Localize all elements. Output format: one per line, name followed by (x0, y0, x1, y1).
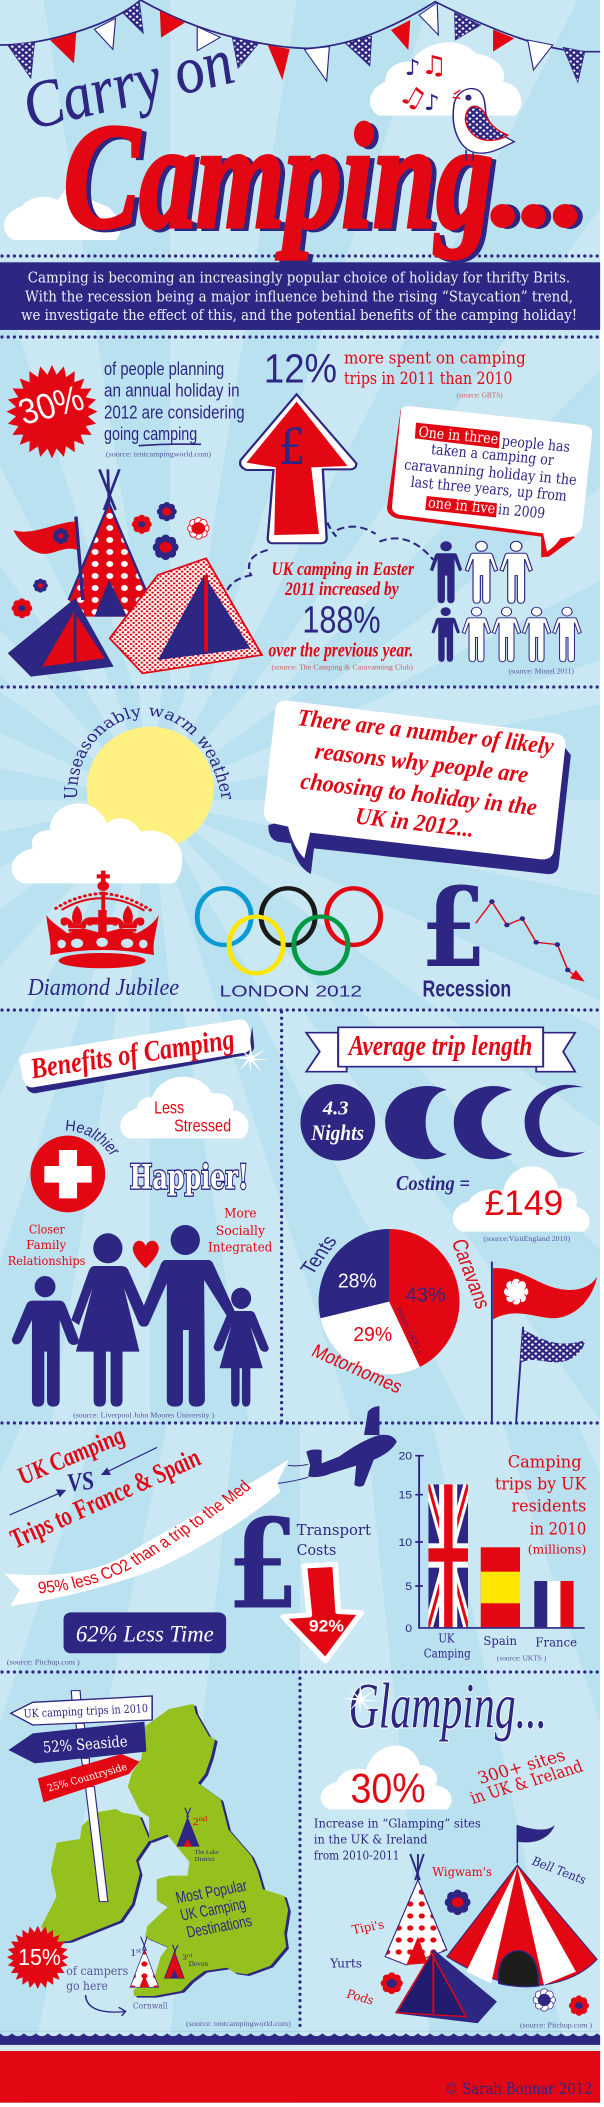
badge: 30% (7, 365, 97, 458)
icon: music notes: ♪ (404, 55, 421, 81)
text: of campers go here (66, 1965, 128, 2016)
cloud: 30%: 30% (351, 1764, 426, 1812)
label: Closer family relationships: Relationships (8, 1255, 86, 1269)
heading: camping trips by UK residents: in 2010 (530, 1520, 586, 1539)
sign: UK camping trips: UK camping trips in 2010 (23, 1702, 148, 1720)
text: 300+ sites: 300+ sites (475, 1746, 568, 1788)
bunting (0, 0, 600, 82)
text: people planning (104, 359, 245, 459)
banner: CO2: 95% less CO2 than a trip to the Med (38, 1479, 251, 1594)
pictogram: family (12, 1225, 269, 1407)
text: people planning: of people planning (104, 359, 224, 380)
sign: 25% Countryside (38, 1754, 139, 1802)
label: London 2012: LONDON 2012 (220, 982, 362, 1000)
badge: 30%: 30% (13, 378, 89, 433)
text: people planning: going camping (104, 424, 197, 445)
label: Diamond Jubilee: Diamond Jubilee (27, 974, 179, 1001)
map: UK and Ireland (42, 1705, 290, 1997)
icon: plane (278, 1406, 397, 1487)
marker: Lake District: nd (199, 1815, 207, 1823)
header panel (0, 0, 600, 330)
text: UK camping in Easter: 2011 increased by (284, 577, 399, 600)
callout: 62% less time: 62% Less Time (76, 1622, 214, 1647)
marker: Devon: Devon (189, 1959, 208, 1968)
panel: UK vs abroad (4, 1406, 587, 1666)
text: most popular destinations: Most Popular (174, 1876, 249, 1907)
illustration: glamping tents (381, 1825, 597, 2023)
bar chart: 10 (398, 1538, 412, 1549)
signpost (8, 1691, 152, 1902)
bar: Spain (481, 1547, 520, 1627)
heading: UK Camping vs France and Spain (4, 1421, 207, 1554)
sign: 25% Countryside: 25% Countryside (46, 1761, 129, 1794)
bar chart: France (535, 1636, 577, 1650)
heading: camping trips by UK residents: trips by UK (495, 1475, 587, 1494)
label: Closer family relationships: Family (26, 1239, 67, 1253)
stat: 12% (264, 347, 526, 399)
marker: Cornwall: st (136, 1947, 141, 1954)
panel: statistics (7, 347, 592, 677)
arrow: up (240, 394, 356, 543)
icon: moon with 4.3 nights: Nights (310, 1121, 364, 1146)
marker: Lake District: District (195, 1855, 215, 1863)
marker: Lake District (176, 1808, 219, 1863)
bar chart: 5 (405, 1582, 412, 1593)
label: more socially integrated: Socially (216, 1224, 265, 1239)
title: Carry on: Carry on (13, 24, 242, 144)
dashed arrows (227, 523, 433, 590)
cloud: over sun (12, 803, 182, 883)
bar chart: UK (438, 1632, 455, 1646)
icon: moon with 4.3 nights: 4.3 (322, 1097, 349, 1119)
intro band (0, 262, 600, 330)
ribbon: Average trip length (306, 1027, 575, 1072)
pie chart: 43% (406, 1283, 446, 1306)
stat: 12%: 12% (264, 347, 337, 392)
marker: Devon: rd (187, 1953, 192, 1959)
text: people planning: 2012 are considering (104, 403, 245, 423)
label: Closer family relationships (8, 1223, 86, 1269)
pictogram: one in three (430, 541, 532, 603)
text: UK camping in Easter: 188% (302, 598, 381, 641)
labels: accommodation types: Yurts (329, 1957, 362, 1971)
bar: France (534, 1581, 574, 1627)
cloud: behind bird (370, 42, 521, 116)
heading: UK Camping vs France and Spain: UK Camping (12, 1421, 130, 1490)
cloud: 30% (321, 1746, 452, 1812)
speech bubble: likely reasons: UK in 2012... (354, 802, 476, 842)
curved text: Healthier: Healthier (66, 1120, 119, 1154)
text: most popular destinations (174, 1876, 254, 1941)
bar chart: 0 (405, 1624, 412, 1635)
banner: Benefits of Camping (19, 1019, 270, 1093)
text: UK camping in Easter: (source: The Camping & Caravanning Club) (272, 663, 413, 671)
text: increase in glamping: Increase in “Glamping” sites (314, 1817, 481, 1831)
source: Liverpool: (source: Liverpool John Moores University ) (73, 1411, 215, 1419)
pie chart (297, 1229, 494, 1398)
icon: music notes (394, 50, 448, 116)
heading: UK Camping vs France and Spain: VS (65, 1466, 96, 1498)
pictogram: one in five (431, 607, 581, 662)
bar chart: Camping (424, 1647, 471, 1661)
callout: 62% less time (64, 1612, 226, 1653)
label: Closer family relationships: Closer (29, 1223, 65, 1237)
label: more socially integrated: Integrated (208, 1241, 272, 1255)
heading: camping trips by UK residents: Camping (508, 1453, 582, 1472)
pie chart: (source: UKTS ) (395, 1306, 424, 1354)
marker: Cornwall (130, 1937, 168, 2011)
banner: CO2 (4, 1460, 289, 1606)
cloud: Less Stressed: Less (154, 1098, 184, 1117)
icon: olympic rings (197, 888, 381, 973)
label: more socially integrated (208, 1206, 272, 1255)
marker: Lake District: The Lake (195, 1848, 219, 1856)
icon: music notes: ♫ (394, 78, 433, 116)
badge: 15% (7, 1926, 69, 1989)
arrow: down 92% (283, 1564, 361, 1661)
speech bubble: likely reasons: reasons why people are (313, 737, 530, 788)
speech bubble: likely reasons: choosing to holiday in the (299, 767, 539, 821)
icon: moon with 4.3 nights (300, 1084, 375, 1161)
label: Transport Costs: Transport (297, 1521, 371, 1539)
label: Happier: Happier! (130, 1158, 248, 1197)
ribbon: Average trip length: Average trip length (347, 1030, 532, 1061)
source: tentcampingworld: (source: tentcampingworld.com) (186, 2019, 291, 2028)
source: Pitchup: (source: Pitchup.com ) (7, 1658, 80, 1666)
icon: music notes: ♫ (421, 50, 448, 80)
cloud: Less Stressed: Stressed (174, 1116, 231, 1135)
text: most popular destinations: UK Camping (178, 1894, 248, 1924)
illustration: tents and flowers (8, 469, 262, 677)
label: Transport Costs (297, 1521, 371, 1559)
pie chart: 29% (353, 1322, 392, 1346)
pie chart: Tents (297, 1232, 342, 1278)
labels: accommodation types: Wigwam's (432, 1866, 492, 1880)
sign: 52% Seaside (8, 1722, 146, 1763)
cloud: Less Stressed (120, 1077, 248, 1138)
arrow: up: £ (278, 418, 306, 476)
speech bubble: one in three: One in three (417, 423, 499, 448)
heading: UK Camping vs France and Spain: Trips to France & Spain (4, 1443, 207, 1554)
bar: UK camping (428, 1484, 468, 1627)
heading: camping trips by UK residents: residents (512, 1497, 586, 1516)
stat: 12%: trips in 2011 than 2010 (344, 369, 512, 389)
speech bubble: likely reasons (264, 701, 571, 874)
text: UK camping in Easter (268, 557, 415, 671)
text: most popular destinations: Destinations (184, 1911, 254, 1941)
cloud: £149 (453, 1166, 589, 1232)
marker: Lake District: 2 (193, 1817, 199, 1828)
cloud: £149: £149 (485, 1184, 563, 1223)
labels: accommodation types: Tipi's (351, 1918, 386, 1938)
icon: pound sign: £ (421, 863, 486, 993)
text: increase in glamping (314, 1817, 481, 1863)
speech bubble: one in three: taken a camping or (430, 440, 555, 469)
heading: camping trips by UK residents: (millions) (528, 1543, 586, 1557)
text: people planning: an annual holiday in (104, 381, 240, 401)
panel: benefits and trip length (8, 1019, 597, 1422)
labels: accommodation types: Bell Tents (529, 1855, 588, 1888)
panel: reasons (12, 700, 585, 1002)
label: more socially integrated: More (224, 1206, 257, 1221)
icon: pound sign: £ (227, 1493, 299, 1637)
heading: camping trips by UK residents (495, 1453, 587, 1557)
speech bubble: one in three (387, 406, 592, 557)
bar chart: Spain (483, 1635, 517, 1649)
marker: Cornwall: 1 (130, 1948, 136, 1959)
speech bubble: one in three: one in five (427, 494, 496, 517)
sign: 52% Seaside: 52% Seaside (42, 1732, 128, 1756)
speech bubble: one in three: in 2009 (497, 500, 546, 522)
pie chart: Motorhomes (308, 1341, 406, 1398)
sign: UK camping trips (11, 1696, 152, 1725)
text: people planning: (source: tentcampingworld.com) (106, 450, 211, 459)
pie chart: 28% (338, 1269, 377, 1292)
text: increase in glamping: in the UK & Ireland (314, 1833, 428, 1847)
icon: bird (453, 89, 514, 161)
cloud: behind title left (4, 190, 121, 240)
bar chart: 15 (398, 1490, 412, 1501)
label: Transport Costs: Costs (297, 1541, 336, 1559)
badge: 15%: 15% (18, 1945, 61, 1971)
icon: health cross (30, 1136, 105, 1212)
text: UK camping in Easter: UK camping in Easter (272, 557, 415, 580)
icon: heart (133, 1241, 159, 1268)
bar chart: (source: UKTS ) (497, 1654, 547, 1662)
pie chart: Caravans (446, 1237, 494, 1311)
bar chart (398, 1451, 585, 1662)
icon: sun (87, 727, 214, 850)
source: Pitchup: (source: Pitchup.com ) (520, 2021, 592, 2029)
icon: music notes: ♪ (424, 90, 440, 116)
source: VisitEngland: (source:VisitEngland 2010) (483, 1234, 570, 1243)
footer (0, 2032, 600, 2103)
icon: crown (46, 871, 159, 968)
title: Camping: ... (491, 136, 586, 246)
marker: Devon (164, 1945, 208, 1978)
panel: destinations and glamping (0, 1670, 600, 2103)
stat: 12%: (source: GBTS) (456, 391, 503, 399)
marker: Cornwall: Cornwall (133, 2001, 168, 2011)
banner: Benefits of Camping: Benefits of Camping (27, 1023, 237, 1085)
labels: accommodation types (329, 1855, 588, 2008)
text: increase in glamping: from 2010-2011 (314, 1849, 399, 1863)
text: of campers go here: of campers (66, 1965, 128, 1979)
icon: flags (492, 1262, 597, 1422)
source: Mintel: (source: Mintel 2011) (508, 667, 574, 675)
labels: accommodation types: Pods (344, 1988, 376, 2008)
text: UK camping in Easter: over the previous year. (268, 639, 413, 661)
curved text: warm weather: Unseasonably warm weather (64, 708, 232, 800)
marker: Devon: 3 (182, 1953, 187, 1962)
text: of campers go here: go here (66, 1980, 108, 1994)
icon: crescent moons (385, 1085, 586, 1159)
speech bubble: one in three: people has (501, 432, 571, 456)
stat: 12%: more spent on camping (344, 349, 526, 368)
arrow: down 92%: 92% (309, 1617, 344, 1635)
chart: recession line (476, 899, 585, 982)
bar chart: 20 (398, 1451, 412, 1462)
label: Costing: Costing = (396, 1171, 470, 1195)
label: Recession: Recession (423, 977, 511, 1002)
